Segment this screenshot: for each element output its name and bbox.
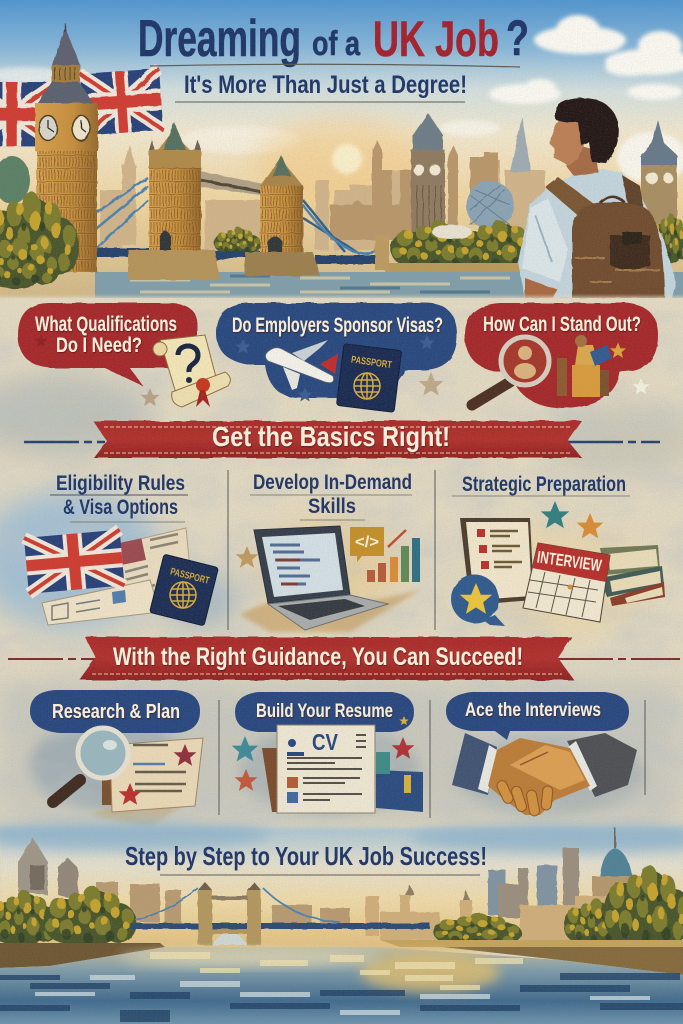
left trees [0,156,79,289]
shirt [518,168,676,298]
title: Dreaming [138,10,301,68]
heading [50,472,188,522]
Big Ben [35,23,98,272]
icon: star badge [451,575,505,626]
icon: laptop [240,526,420,632]
icon: magnifying glass [53,728,128,802]
heading: & Visa Options [63,496,178,519]
banner: With the Right Guidance [8,637,680,680]
dome [600,848,632,893]
hair [555,98,619,163]
backpack [572,202,665,298]
right clock tower [641,165,677,225]
column: strategic preparation [451,473,665,626]
speech bubble: stand out [465,303,658,408]
title [138,10,529,68]
column: develop in-demand skills [236,471,420,632]
student with backpack [518,98,676,298]
divider [219,700,645,818]
icon: handshake [452,733,637,817]
pill label: Ace the Interviews [465,700,601,721]
icon: UK flag [24,530,125,594]
neck and face [566,142,598,176]
pill label: Research & Plan [52,701,180,723]
heading: Strategic Preparation [462,473,626,496]
column: eligibility rules and visa options [24,472,218,626]
icon: interview calendar: INTERVIEW [536,547,603,575]
icon: checklist [460,518,534,605]
flag behind Big Ben [0,68,163,146]
banner: Get the Basics Right [24,421,660,458]
step: research and plan [30,690,203,812]
pill label [446,692,629,740]
pill label [235,692,414,732]
title: of a [312,25,361,63]
heading: Eligibility Rules [56,472,185,495]
straps [545,177,602,226]
clouds [0,15,683,184]
sun [255,120,435,210]
heading: Develop In-Demand [253,471,412,494]
pill label: Build Your Resume [256,701,393,722]
footer tagline: Step by Step to Your UK Job Success! [125,841,487,871]
icon: magnifier with person [472,337,549,405]
icon: stars [541,501,603,538]
icon: CV document [277,725,375,813]
icon: diploma scroll [153,335,230,407]
embankments [0,940,683,975]
mid clock tower [411,150,445,235]
river [95,272,683,298]
speech bubble: visas [216,303,457,412]
banner: With the Right Guidance: With the Right Guidance, You Can Succeed! [113,643,523,671]
heading: Skills [308,495,356,518]
footer sky [0,828,683,950]
icon: passport [150,554,218,626]
small tower bridge [130,882,430,945]
icon: books [600,545,665,606]
icon: airplane [265,340,338,390]
icon: passport: PASSPORT [350,355,392,371]
subtitle: It's More Than Just a Degree! [184,71,467,99]
title: UK Job [373,11,499,67]
icon: interview calendar [523,543,610,622]
divider [228,470,435,630]
icon: CV document: CV [312,729,339,755]
icon: stars [232,716,414,791]
distant buildings [100,113,677,252]
trees [0,865,683,949]
distant buildings [18,828,640,945]
banner: Get the Basics Right: Get the Basics Right! [212,421,450,452]
embankment [385,263,525,273]
icon: podium figure [557,335,612,397]
icon: stars [610,342,650,394]
icon: star [419,372,443,396]
icon: paper with stars [102,738,203,812]
speech bubble: qualifications: Do I Need? [56,334,142,357]
speech bubble: visas: Do Employers Sponsor Visas? [232,314,443,337]
heading [250,471,412,520]
icon: code bubble [350,527,384,562]
step: ace the interviews [446,692,637,817]
torn edge between scene and parchment [0,297,683,311]
bar chart [367,530,420,582]
hero illustration: London skyline and student [0,0,683,311]
speech bubble: qualifications: What Qualifications [35,313,177,336]
trees behind bridge [214,213,683,271]
river reflections [0,947,683,1024]
footer cityscape [0,821,683,1024]
tower bridge [97,122,389,280]
sky [0,0,683,298]
icon: code bubble: </> [355,534,379,551]
pill label [30,690,200,733]
step: build your resume [232,692,423,813]
icon: document sheets [42,528,192,625]
icon: wallet and folder [262,748,423,812]
icon: star [236,546,258,568]
icon: star [140,388,160,406]
title: ? [506,10,529,66]
icon: passport [336,344,402,412]
icon: passport: PASSPORT [169,567,210,587]
speech bubble: qualifications [18,303,230,407]
